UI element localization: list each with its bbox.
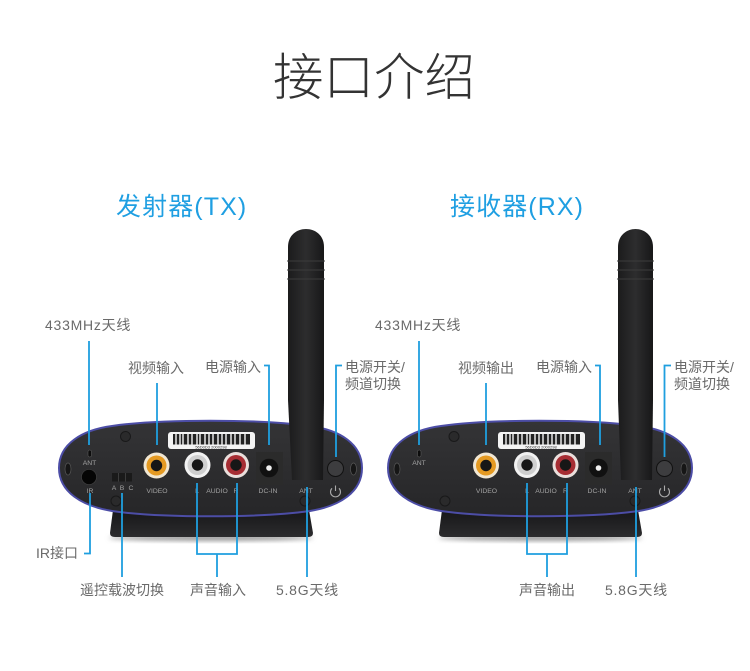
DC-IN jack bbox=[256, 452, 283, 495]
IR port bbox=[82, 470, 96, 495]
label: power switch: 电源开关/ bbox=[674, 359, 734, 375]
carrier switch bbox=[112, 473, 134, 492]
barcode label bbox=[498, 432, 585, 450]
screws bbox=[440, 432, 640, 506]
antenna bbox=[617, 229, 654, 480]
label: IR port bbox=[36, 493, 90, 561]
label: power input bbox=[205, 359, 269, 445]
label: IR port: IR接口 bbox=[36, 545, 78, 561]
label: 5.8G antenna bbox=[276, 487, 339, 598]
label: 5.8G antenna: 5.8G天线 bbox=[605, 582, 668, 598]
carrier switch: B bbox=[120, 485, 125, 492]
IR port: IR bbox=[87, 488, 93, 495]
video jack: VIDEO bbox=[476, 488, 497, 495]
ANT 433 port: ANT bbox=[83, 460, 96, 467]
carrier switch: C bbox=[129, 485, 134, 492]
audio L jack bbox=[184, 452, 210, 495]
audio R jack bbox=[552, 452, 578, 495]
DC-IN jack: DC-IN bbox=[588, 488, 607, 495]
label: 433MHz antenna bbox=[45, 317, 131, 445]
audio label: AUDIO bbox=[206, 488, 228, 495]
panel: transmitter device bbox=[59, 229, 362, 541]
barcode label bbox=[168, 432, 255, 450]
power button bbox=[656, 460, 672, 497]
stand shadow bbox=[438, 535, 642, 541]
barcode label: 56D0D3 2000298 bbox=[195, 445, 227, 450]
screws bbox=[111, 432, 310, 506]
video jack bbox=[473, 452, 499, 495]
audio R jack bbox=[223, 452, 249, 495]
label: power switch: 电源开关/ bbox=[345, 359, 405, 375]
label: power input: 电源输入 bbox=[205, 359, 261, 375]
label: audio input bbox=[190, 483, 246, 598]
label: video input bbox=[128, 360, 184, 445]
antenna bbox=[287, 229, 325, 480]
audio R jack: R bbox=[234, 488, 239, 495]
ANT 433 port: ANT bbox=[412, 460, 426, 467]
audio L jack: L bbox=[195, 488, 199, 495]
label: audio output bbox=[519, 483, 575, 598]
label: 433MHz antenna: 433MHz天线 bbox=[375, 317, 461, 333]
label: power input bbox=[536, 359, 600, 445]
device body bbox=[388, 421, 692, 516]
device body bbox=[59, 421, 362, 516]
side slots bbox=[65, 463, 356, 475]
DC-IN jack: DC-IN bbox=[259, 488, 278, 495]
label: video input: 视频输入 bbox=[128, 360, 184, 376]
label: power switch: 频道切换 bbox=[674, 376, 730, 392]
stand bbox=[110, 510, 313, 537]
ANT 433 port bbox=[412, 450, 426, 467]
label: power switch bbox=[336, 359, 405, 457]
label: video output: 视频输出 bbox=[458, 360, 514, 376]
label: carrier switch bbox=[80, 493, 164, 598]
barcode label: 56D0D3 2000298 bbox=[525, 445, 557, 450]
heading: transmitter: 发射器(TX) bbox=[116, 193, 247, 221]
ANT 433 port bbox=[83, 450, 96, 467]
label: power switch: 频道切换 bbox=[345, 376, 401, 392]
stand bbox=[439, 510, 642, 537]
audio R jack: R bbox=[563, 488, 568, 495]
label: 5.8G antenna bbox=[605, 487, 668, 598]
label: video output bbox=[458, 360, 514, 445]
label: 5.8G antenna: 5.8G天线 bbox=[276, 582, 339, 598]
label: 433MHz antenna: 433MHz天线 bbox=[45, 317, 131, 333]
audio label: AUDIO bbox=[535, 488, 557, 495]
callouts: transmitter bbox=[36, 317, 405, 598]
label: 433MHz antenna bbox=[375, 317, 461, 445]
antenna port label: ANT bbox=[628, 488, 642, 495]
label: carrier switch: 遥控载波切换 bbox=[80, 582, 164, 598]
power button bbox=[328, 460, 344, 497]
side slots bbox=[394, 463, 687, 475]
label: power switch bbox=[664, 359, 734, 457]
audio L jack bbox=[514, 452, 540, 495]
label: audio output: 声音输出 bbox=[519, 582, 575, 598]
stand shadow bbox=[109, 535, 313, 541]
video jack bbox=[144, 452, 170, 495]
carrier switch: A bbox=[112, 485, 117, 492]
audio L jack: L bbox=[525, 488, 529, 495]
label: audio input: 声音输入 bbox=[190, 582, 246, 598]
callouts: receiver bbox=[375, 317, 734, 598]
title: 接口介绍 bbox=[273, 49, 475, 106]
DC-IN jack bbox=[585, 452, 612, 495]
video jack: VIDEO bbox=[146, 488, 168, 495]
label: power input: 电源输入 bbox=[536, 359, 592, 375]
panel: receiver device bbox=[388, 229, 692, 541]
heading: receiver: 接收器(RX) bbox=[450, 193, 584, 221]
antenna port label: ANT bbox=[299, 488, 313, 495]
